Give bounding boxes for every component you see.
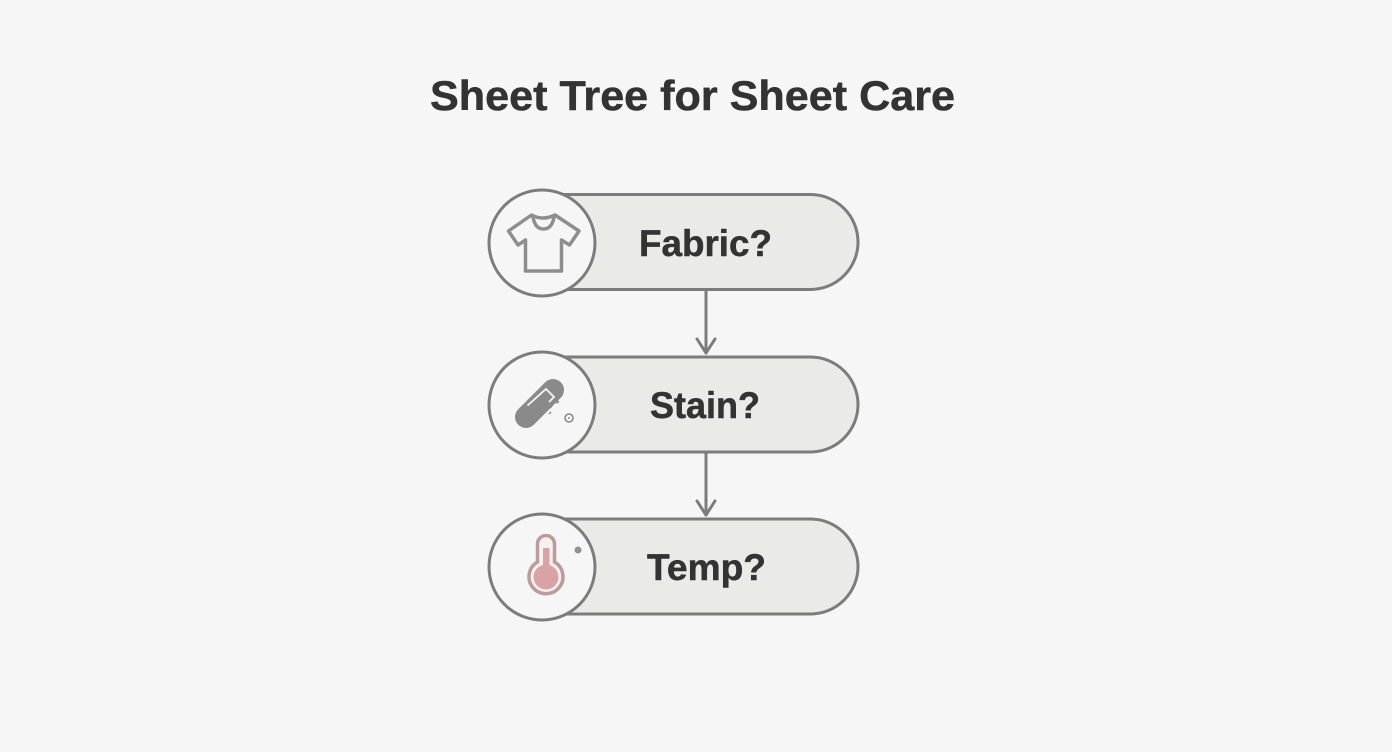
icon: skateboard <box>526 389 573 422</box>
step: stain <box>489 352 858 458</box>
arrow: fabric to stain <box>697 290 715 353</box>
pill: temp <box>500 519 858 614</box>
arrow: stain to temp <box>697 452 715 515</box>
label: stain: Stain? <box>650 385 760 426</box>
pill: stain <box>500 357 858 452</box>
label: fabric: Fabric? <box>639 223 772 264</box>
step: fabric <box>489 190 858 296</box>
icon: t-shirt <box>508 215 579 271</box>
icon circle: temp <box>489 514 595 620</box>
icon circle: stain <box>489 352 595 458</box>
step: temp <box>489 514 858 620</box>
label: temp: Temp? <box>647 547 766 588</box>
pill: fabric <box>500 194 858 290</box>
icon circle: fabric <box>489 190 595 296</box>
title: Sheet Tree for Sheet Care <box>430 72 955 119</box>
icon: thermometer <box>529 536 582 594</box>
